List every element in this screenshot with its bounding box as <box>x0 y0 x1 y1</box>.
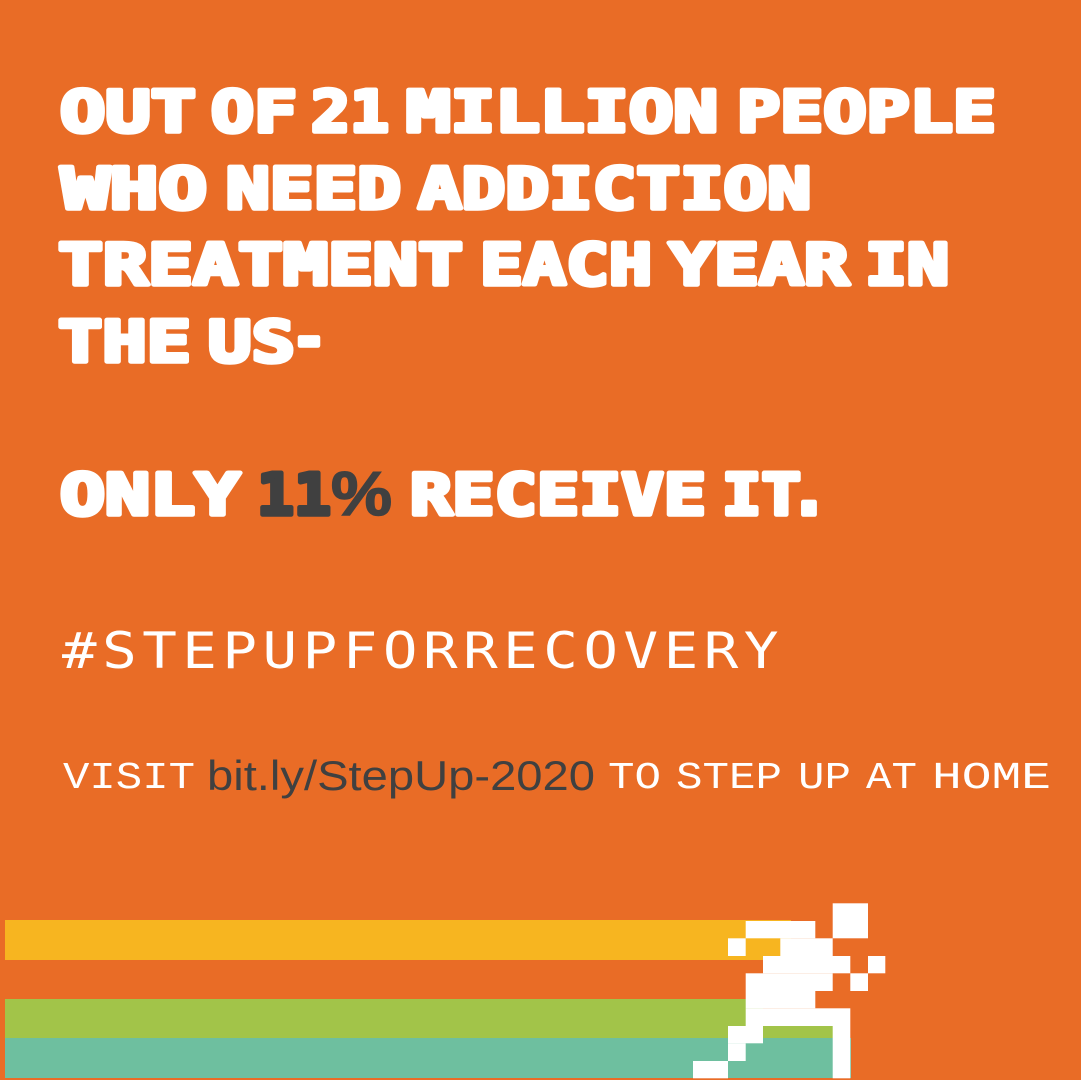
heading: statistic statement: PEOPLE <box>737 80 996 146</box>
heading: statistic statement: MILLION <box>406 80 718 146</box>
heading: statistic statement <box>58 80 996 376</box>
heading: statistic statement: US <box>208 310 295 376</box>
heading: statistic statement: NEED <box>226 157 401 223</box>
icon: pixel runner <box>693 903 885 1078</box>
heading: statistic statement: YEAR <box>669 233 850 299</box>
heading: statistic statement: EACH <box>480 233 652 299</box>
heading: statistic statement: TREATMENT <box>58 233 463 299</box>
visit link line: STEP <box>676 757 782 800</box>
green stripe <box>5 999 833 1038</box>
teal stripe <box>5 1038 851 1078</box>
heading: statistic statement: THE <box>58 310 191 376</box>
visit link line: TO <box>608 757 661 800</box>
heading: statistic statement: OF <box>211 80 297 146</box>
visit link line: bit.ly/StepUp-2020 <box>207 752 595 799</box>
hashtag: #STEPUPFORRECOVERY <box>62 622 778 680</box>
heading: statistic statement: ADDICTION <box>418 157 811 223</box>
callout: only 11% receive it: RECEIVE <box>410 463 706 529</box>
heading: statistic statement: - <box>292 306 326 372</box>
callout: only 11% receive it: 11 <box>257 463 331 529</box>
visit link line: AT <box>866 757 917 800</box>
visit link line: HOME <box>932 757 1051 800</box>
visit link line: VISIT <box>63 757 195 800</box>
callout: only 11% receive it: IT <box>722 463 801 529</box>
heading: statistic statement: 21 <box>311 80 389 146</box>
callout: only 11% receive it: % <box>331 460 392 529</box>
visit link line: UP <box>798 757 851 800</box>
heading: statistic statement: WHO <box>61 157 207 223</box>
yellow stripe <box>5 920 791 960</box>
heading: statistic statement: IN <box>865 233 949 299</box>
visit link line <box>63 752 1051 800</box>
callout: only 11% receive it: ONLY <box>60 463 241 529</box>
heading: statistic statement: OUT <box>60 80 196 146</box>
callout: only 11% receive it <box>60 450 830 532</box>
callout: only 11% receive it: . <box>788 450 830 532</box>
